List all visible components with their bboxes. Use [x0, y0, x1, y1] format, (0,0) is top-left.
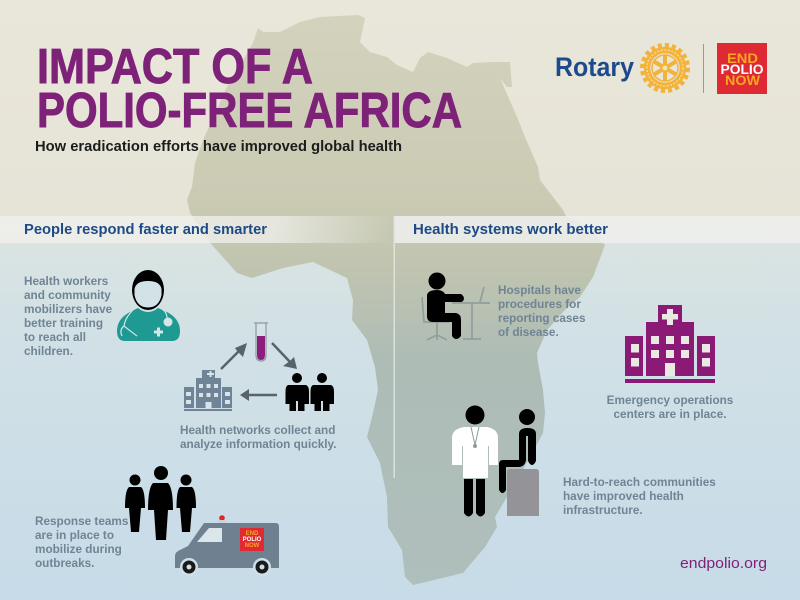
text: emergency: Emergency operations	[607, 394, 734, 407]
Rotary logo: Rotary	[555, 52, 634, 82]
text: health workers: and community	[24, 289, 111, 302]
section band: left	[0, 216, 393, 243]
text: hospitals: Hospitals have	[498, 284, 581, 297]
arrow: people to hospital	[240, 389, 277, 401]
text: response teams: Response teams	[35, 515, 129, 528]
text: health networks: Health networks collect and	[180, 424, 335, 437]
icon: ambulance: POLIO	[243, 537, 262, 543]
title	[37, 40, 462, 138]
website: endpolio.org	[680, 555, 767, 572]
text: response teams: mobilize during	[35, 543, 122, 556]
arrow: hospital to tube	[221, 343, 247, 369]
map of Africa	[187, 15, 605, 585]
icon: response team	[125, 466, 196, 540]
End Polio Now logo: END	[727, 51, 758, 66]
text: health workers: to reach all	[24, 331, 86, 344]
arrow: tube to people	[272, 343, 297, 369]
End Polio Now logo: POLIO	[720, 62, 764, 77]
text: hospitals: reporting cases	[498, 312, 586, 325]
subtitle: How eradication efforts have improved global health	[35, 139, 402, 155]
icon: ambulance	[175, 515, 279, 576]
text: response teams: outbreaks.	[35, 557, 94, 570]
text: emergency	[607, 394, 734, 421]
text: hard-to-reach	[563, 476, 716, 517]
section band: right	[395, 216, 800, 243]
text: response teams: are in place to	[35, 529, 114, 542]
title: IMPACT OF A	[37, 40, 313, 94]
icon: person at desk	[422, 272, 490, 340]
text: hard-to-reach: have improved health	[563, 490, 684, 503]
End Polio Now logo	[703, 43, 767, 94]
text: hospitals: procedures for	[498, 298, 581, 311]
text: health workers: Health workers	[24, 275, 109, 288]
icon: purple hospital	[625, 305, 715, 383]
text: health networks: analyze information quickly.	[180, 438, 336, 451]
End Polio Now logo: NOW	[725, 73, 760, 88]
text: health workers: children.	[24, 345, 73, 358]
icon: ambulance: END	[246, 531, 259, 537]
text: emergency: centers are in place.	[614, 408, 726, 421]
Rotary logo	[555, 45, 688, 91]
text: response teams	[35, 515, 129, 570]
text: health workers	[24, 275, 113, 358]
heading: people respond: People respond faster and smarter	[24, 222, 267, 238]
icon: test tube	[254, 323, 268, 361]
text: hard-to-reach: infrastructure.	[563, 504, 643, 517]
text: hospitals: of disease.	[498, 326, 559, 339]
text: hard-to-reach: Hard-to-reach communities	[563, 476, 716, 489]
text: health workers: mobilizers have	[24, 303, 113, 316]
icon: health worker	[117, 270, 180, 341]
text: health networks	[180, 424, 336, 451]
icon: two people	[286, 373, 334, 411]
icon: doctor and patient	[452, 406, 539, 516]
title: POLIO-FREE AFRICA	[37, 84, 462, 138]
icon: small hospital	[184, 370, 232, 411]
icon: ambulance: NOW	[245, 543, 260, 549]
text: hospitals	[498, 284, 586, 339]
heading: health systems: Health systems work better	[413, 222, 608, 238]
text: health workers: better training	[24, 317, 103, 330]
